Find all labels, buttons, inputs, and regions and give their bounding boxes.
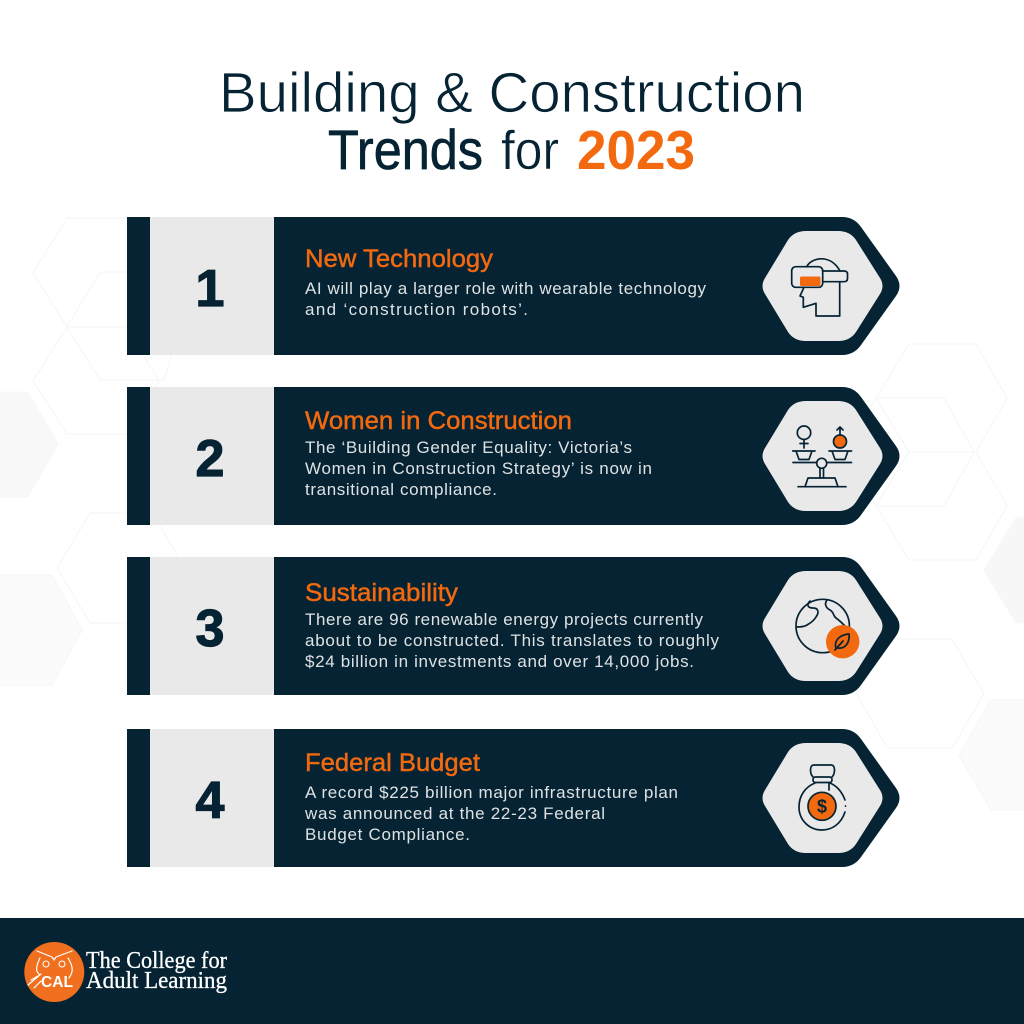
text: new technology body: and ‘construction robots’.	[305, 300, 528, 319]
text: sustainability body: There are 96 renewable energy projects currently	[305, 610, 704, 629]
text: women in construction body: The ‘Building Gender Equality: Victoria’s	[305, 438, 632, 457]
number 2: 2	[196, 430, 224, 488]
footer band	[0, 918, 1024, 1024]
heading: new technology: New Technology	[305, 245, 494, 273]
text: new technology body: AI will play a larger role with wearable technology	[305, 279, 706, 298]
logo: CAL owl badge: CAL	[41, 974, 73, 991]
number 4: 4	[196, 772, 225, 830]
title: for	[501, 119, 559, 181]
title: Building & Construction	[219, 61, 805, 125]
panel: new technology	[127, 217, 900, 355]
text: sustainability body: $24 billion in investments and over 14,000 jobs.	[305, 652, 694, 671]
text: sustainability body	[305, 610, 720, 671]
logo wordmark: The College for	[86, 948, 227, 974]
icon: VR headset on head	[792, 259, 848, 316]
number 1: 1	[196, 260, 224, 318]
logo wordmark: Adult Learning	[86, 968, 227, 994]
text: women in construction body: transitional compliance.	[305, 480, 497, 499]
logo: CAL owl badge	[24, 942, 84, 1002]
text: federal budget body: A record $225 billion major infrastructure plan	[305, 783, 678, 802]
text: federal budget body: was announced at the 22-23 Federal	[304, 804, 605, 823]
title	[219, 61, 805, 181]
icon: scales with gender symbols	[793, 426, 852, 487]
icon: money bag	[799, 765, 846, 830]
text: women in construction body	[305, 438, 652, 499]
heading: sustainability: Sustainability	[305, 579, 459, 607]
text: federal budget body: Budget Compliance.	[305, 825, 470, 844]
text: women in construction body: Women in Construction Strategy’ is now in	[305, 459, 652, 478]
title: Trends	[328, 118, 483, 181]
panel: sustainability	[127, 557, 900, 695]
text: sustainability body: about to be constructed. This translates to roughly	[305, 631, 720, 650]
heading: federal budget: Federal Budget	[305, 749, 480, 777]
text: federal budget body	[304, 783, 678, 844]
icon: money bag: $	[817, 796, 827, 816]
panel: federal budget	[127, 729, 900, 867]
panel: women in construction	[127, 387, 900, 525]
number 3: 3	[196, 600, 224, 658]
heading: women in construction: Women in Construction	[305, 407, 572, 435]
logo wordmark	[86, 948, 227, 994]
icon: globe with leaf	[796, 599, 859, 658]
text: new technology body	[305, 279, 706, 319]
title: 2023	[577, 119, 695, 181]
